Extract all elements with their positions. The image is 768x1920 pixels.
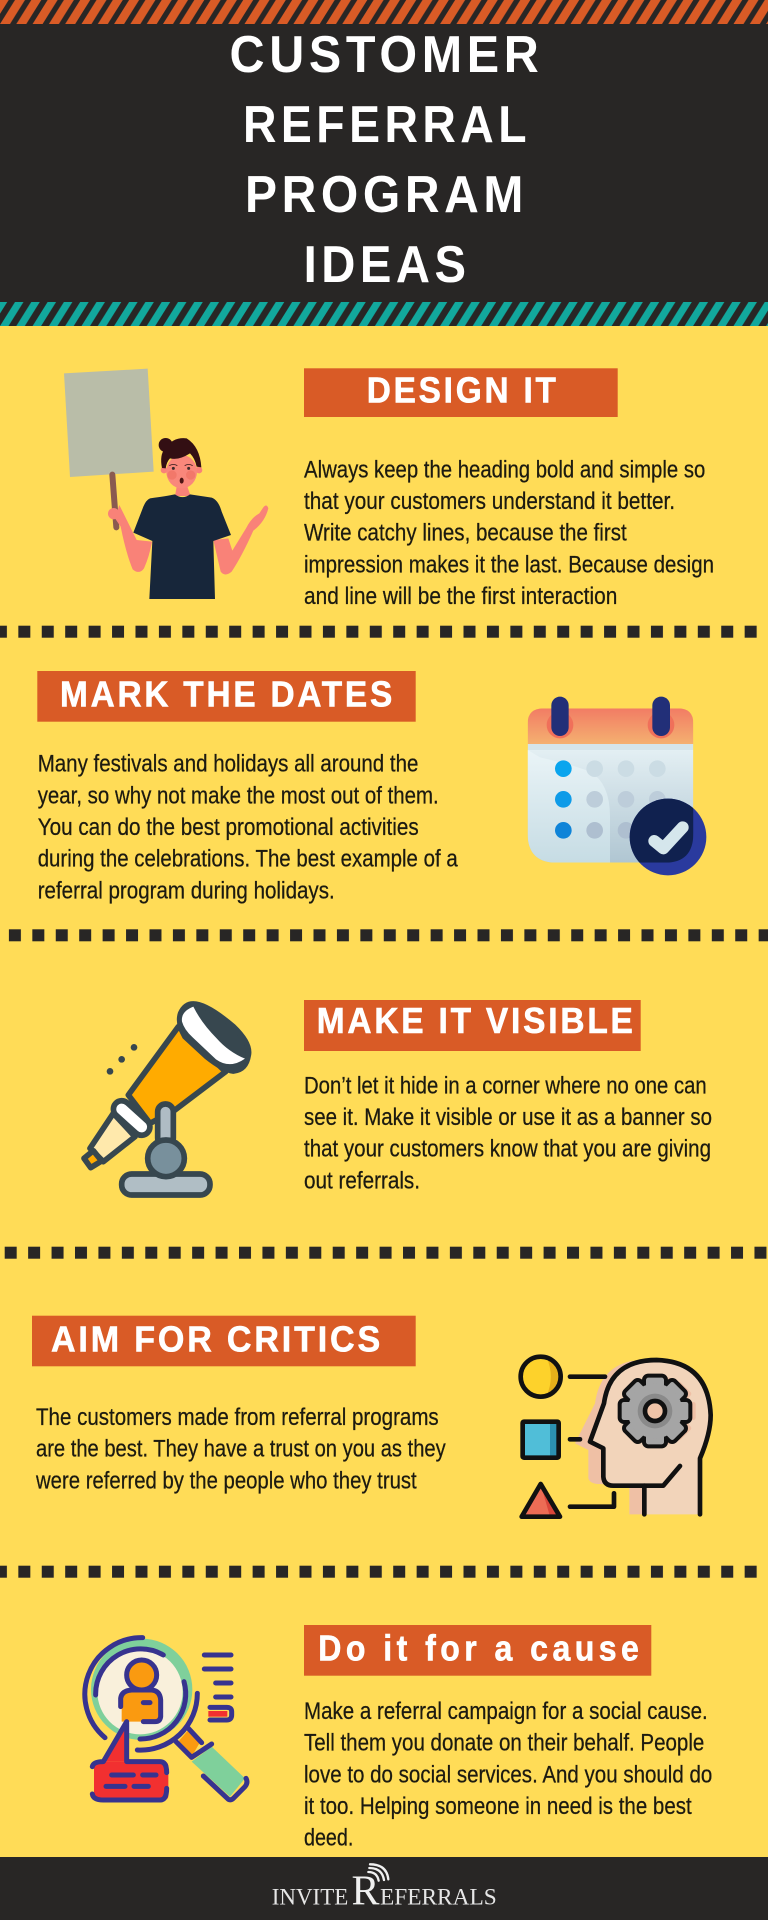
text: design it: that your customers understand it better. [304, 488, 675, 515]
heading: mark the dates: MARK THE DATES [60, 674, 395, 714]
panel: design it [64, 368, 714, 610]
heading: design it [304, 368, 618, 417]
text: aim for critics: were referred by the people who they trust [35, 1467, 417, 1494]
icon: calendar with check badge [528, 697, 706, 875]
icon: head with gear and shapes [521, 1357, 711, 1517]
text: aim for critics [35, 1404, 446, 1494]
illustration: person holding a sign [64, 369, 268, 599]
text: aim for critics: are the best. They have a trust on you as they [36, 1436, 446, 1463]
text: make it visible [304, 1072, 712, 1194]
title: PROGRAM [245, 166, 528, 224]
text: mark the dates [38, 751, 458, 904]
title: IDEAS [304, 236, 471, 294]
text: design it [304, 456, 714, 610]
title: CUSTOMER [230, 26, 544, 84]
heading: aim for critics: AIM FOR CRITICS [51, 1319, 383, 1360]
text: mark the dates: during the celebrations. The best example of a [38, 846, 458, 873]
text: design it: and line will be the first interaction [304, 583, 617, 610]
text: make it visible: out referrals. [304, 1167, 420, 1194]
text: do it for a cause: deed. [304, 1825, 353, 1852]
logo: InviteReferrals: R [352, 1868, 380, 1914]
text: do it for a cause: Tell them you donate on their behalf. People [304, 1730, 704, 1757]
panel: mark the dates [37, 671, 706, 904]
text: do it for a cause [304, 1698, 712, 1852]
title: REFERRAL [243, 96, 531, 154]
title [230, 26, 544, 294]
text: do it for a cause: it too. Helping someone in need is the best [304, 1793, 692, 1820]
heading: make it visible: MAKE IT VISIBLE [317, 1000, 636, 1041]
text: mark the dates: referral program during holidays. [38, 877, 335, 904]
icon: telescope [84, 1004, 249, 1195]
heading: do it for a cause: Do it for a cause [318, 1628, 643, 1669]
logo: InviteReferrals: EFERRALS [380, 1884, 497, 1909]
text: make it visible: Don’t let it hide in a corner where no one can [304, 1072, 707, 1099]
text: make it visible: that your customers know that you are giving [304, 1136, 711, 1163]
footer band [0, 1857, 768, 1920]
text: mark the dates: year, so why not make the most out of them. [38, 782, 439, 809]
icon: wifi signal arcs [368, 1864, 388, 1881]
icon: magnifier with person and speech bubble [85, 1638, 247, 1800]
text: do it for a cause: love to do social services. And you should do [304, 1761, 712, 1788]
logo: InviteReferrals: INVITE [272, 1884, 348, 1909]
text: design it: Always keep the heading bold and simple so [304, 456, 705, 483]
text: aim for critics: The customers made from referral programs [36, 1404, 439, 1431]
panel: aim for critics [32, 1316, 711, 1517]
panel: make it visible [84, 1000, 712, 1195]
text: mark the dates: You can do the best promotional activities [38, 814, 419, 841]
panel: do it for a cause [85, 1625, 712, 1852]
heading: design it: DESIGN IT [367, 370, 559, 411]
logo: InviteReferrals [272, 1864, 497, 1914]
text: mark the dates: Many festivals and holidays all around the [38, 751, 418, 778]
header band [0, 0, 768, 326]
text: design it: Write catchy lines, because the first [304, 520, 627, 547]
text: do it for a cause: Make a referral campaign for a social cause. [304, 1698, 708, 1725]
